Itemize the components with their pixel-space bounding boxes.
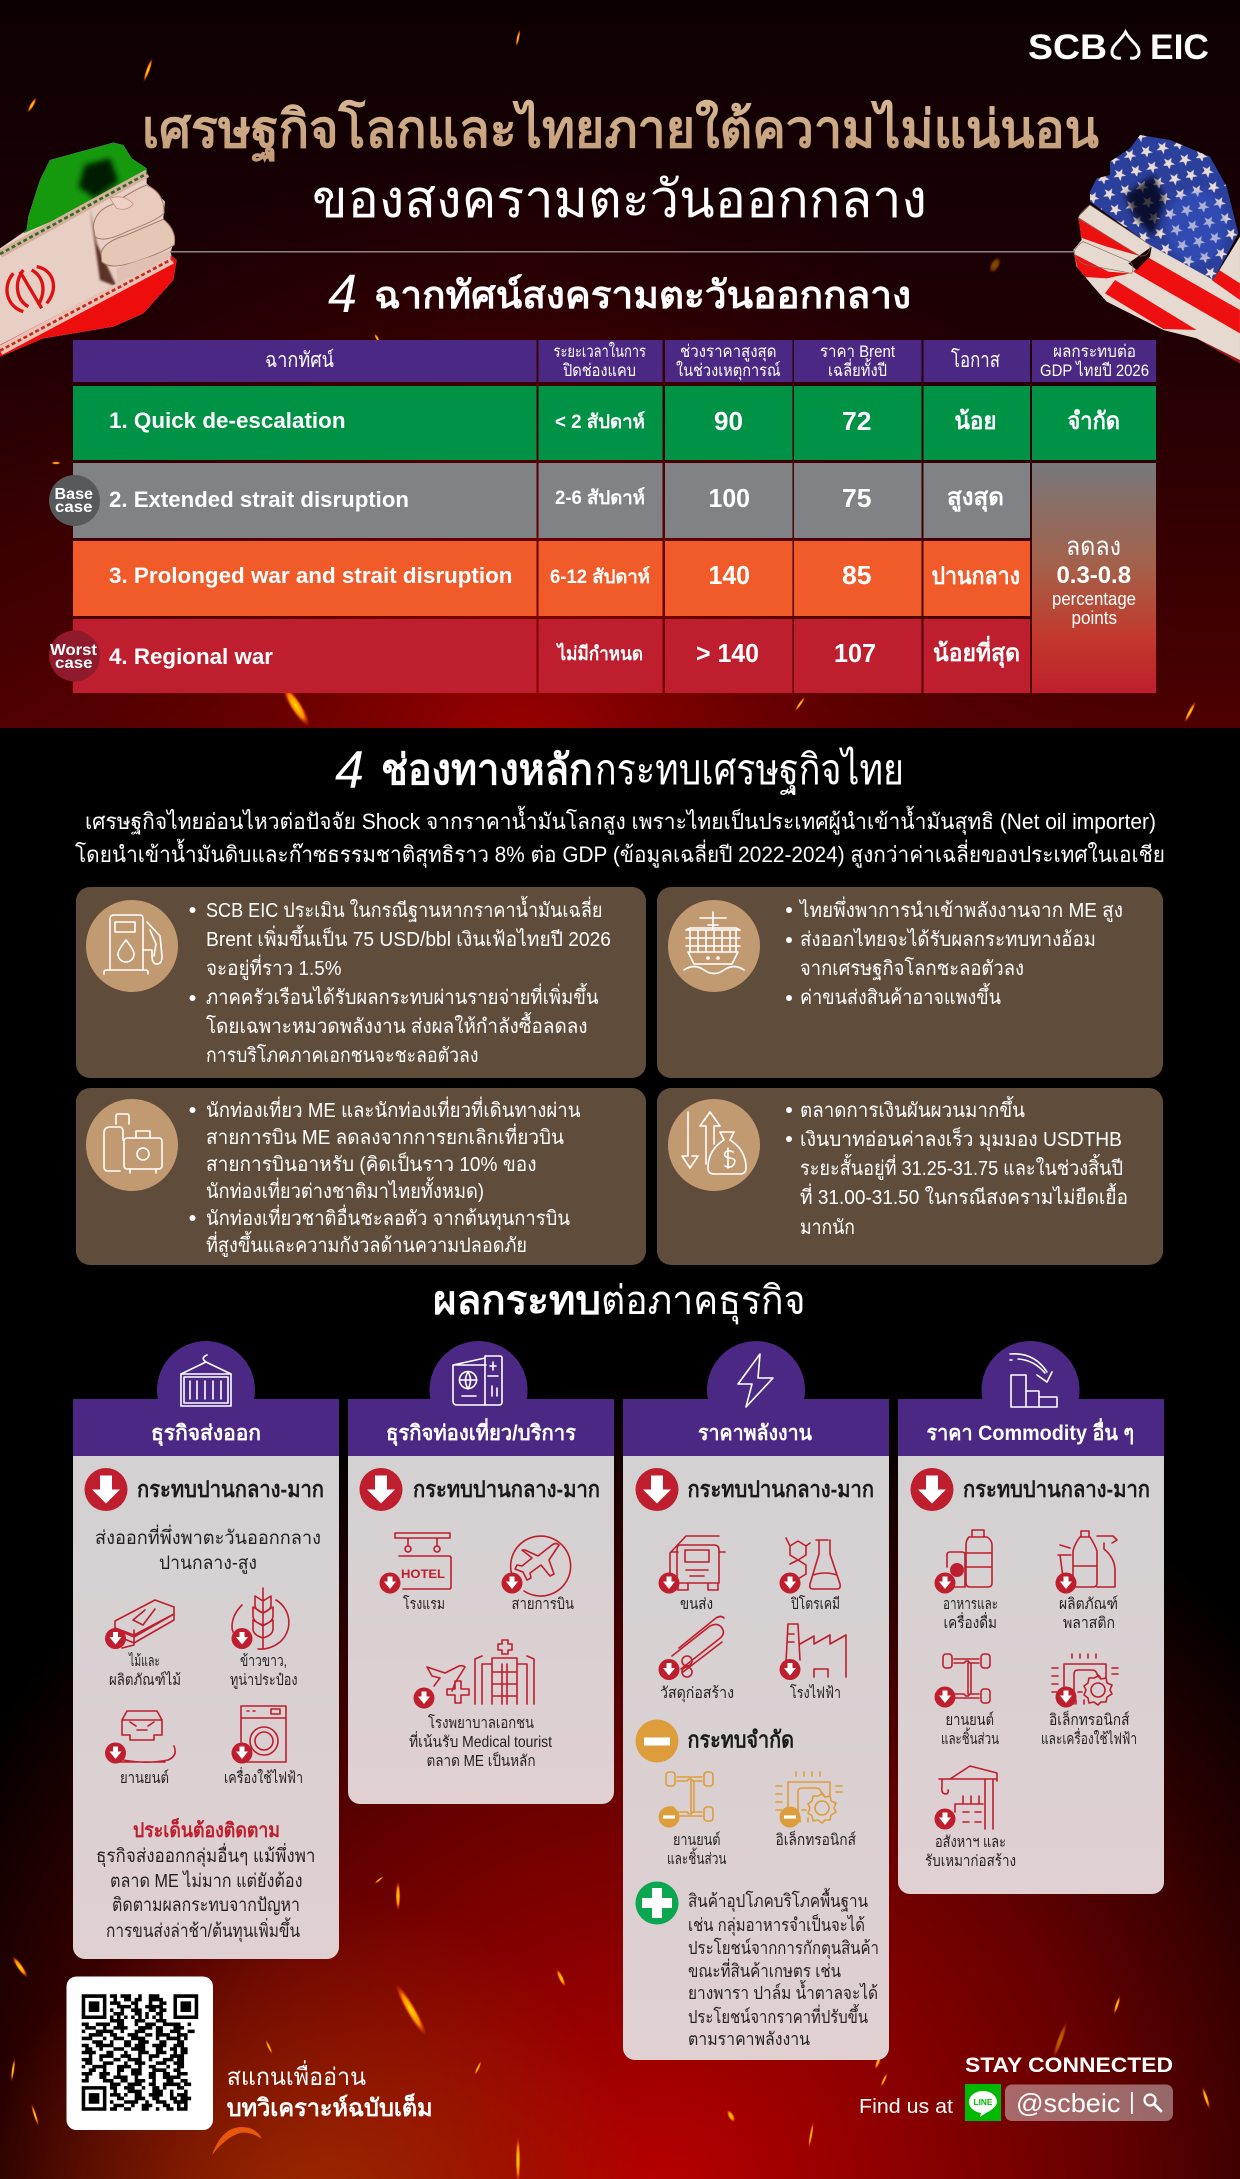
text: exports dependent on ME: ส่งออกที่พึ่งพาตะวันออกกลาง <box>95 1524 321 1549</box>
text: issues to watch: ติดตามผลกระทบจากปัญหา <box>112 1894 300 1916</box>
text: exports dependent on ME: ปานกลาง-สูง <box>159 1553 257 1574</box>
row 1: quick de-escalation: 90 <box>714 406 743 436</box>
text: issues to watch <box>96 1817 316 1943</box>
label: wood <box>109 1652 181 1689</box>
row 2: extended strait disruption: 2. Extended strait disruption <box>109 487 409 512</box>
table header: โอกาส <box>951 348 1000 372</box>
impact label: กระทบปานกลาง-มาก <box>413 1476 600 1502</box>
icon: lightning bolt <box>738 1354 773 1407</box>
row 1: quick de-escalation: 1. Quick de-escalation <box>109 408 346 433</box>
table: scenarios <box>73 340 1156 693</box>
handle pill: @scbeic <box>1016 2088 1120 2118</box>
badge: base case: case <box>55 499 93 516</box>
heading: 4 channels <box>335 741 904 800</box>
badge: worst case: Worst <box>50 642 98 659</box>
table header: ปิดช่องแคบ <box>562 361 636 380</box>
table header: ฉากทัศน์ <box>265 348 334 372</box>
intro paragraph: เศรษฐกิจไทยอ่อนไหวต่อปัจจัย Shock จากราคาน้ำมันโลกสูง เพราะไทยเป็นประเทศผู้นำเข้าน้ำมันสุทธิ (Net oil importer) <box>85 806 1156 835</box>
heading: 4 scenarios: ฉากทัศน์สงครามตะวันออกกลาง <box>374 274 911 317</box>
heading: business impact: ต่อภาคธุรกิจ <box>601 1279 806 1325</box>
text: issues to watch: ประเด็นต้องติดตาม <box>133 1817 280 1842</box>
panel: energy and inflation channel <box>76 887 646 1078</box>
label: cars: ยานยนต์ <box>120 1769 169 1787</box>
icon: Iran flag fist <box>0 143 180 360</box>
text: positive impact: ประโยชน์จากราคาที่ปรับขึ้น <box>688 2004 868 2027</box>
panel: tourism channel: ที่สูงขึ้นและความกังวลด้านความปลอดภัย <box>206 1231 527 1258</box>
label: rice: ข้าวขาว, <box>240 1653 287 1670</box>
label: plastic products <box>1059 1595 1118 1632</box>
label: electronics: อิเล็กทรอนิกส์ <box>776 1830 856 1849</box>
row 4: regional war: > 140 <box>696 638 759 668</box>
merged GDP impact cell: ลดลง <box>1066 531 1121 561</box>
panel: financial market channel <box>657 1088 1163 1265</box>
row 4: regional war: น้อยที่สุด <box>933 635 1020 669</box>
table header: เฉลี่ยทั้งปี <box>828 358 887 380</box>
text: positive impact: ขณะที่สินค้าเกษตร เช่น <box>688 1958 841 1981</box>
label: real estate: อสังหาฯ และ <box>935 1834 1006 1851</box>
text: positive impact: เช่น กลุ่มอาหารจำเป็นจะได้ <box>688 1913 865 1936</box>
row 3: prolonged war and strait disruption: ปานกลาง <box>932 563 1020 590</box>
panel: financial market channel: เงินบาทอ่อนค่าลงเร็ว มุมมอง USDTHB <box>800 1126 1122 1152</box>
background: top section <box>0 0 1240 728</box>
row 2: extended strait disruption: 2-6 สัปดาห์ <box>555 487 645 509</box>
social: stay connected: STAY CONNECTED <box>965 2054 1173 2077</box>
label: appliances: เครื่องใช้ไฟฟ้า <box>224 1767 303 1787</box>
icon: lotus logo mark <box>1112 32 1139 58</box>
impact label: กระทบปานกลาง-มาก <box>688 1476 874 1502</box>
merged GDP impact cell: points <box>1072 608 1117 628</box>
heading: 4 channels: ช่องทางหลัก <box>381 746 593 793</box>
label: auto parts: ยานยนต์ <box>673 1831 720 1849</box>
row 2: extended strait disruption: 100 <box>708 483 750 513</box>
icon: hotel: HOTEL <box>401 1567 445 1581</box>
label: food and beverage: เครื่องดื่ม <box>944 1612 997 1632</box>
merged GDP impact cell: 0.3-0.8 <box>1056 562 1131 589</box>
intro paragraph <box>75 806 1165 868</box>
row 1: quick de-escalation: น้อย <box>954 408 996 435</box>
social: stay connected <box>859 2054 1173 2121</box>
panel: energy and inflation channel: การบริโภคภาคเอกชนจะชะลอตัวลง <box>206 1044 478 1067</box>
icon: passport and ticket <box>453 1356 502 1405</box>
panel: trade channel: ส่งออกไทยจะได้รับผลกระทบทางอ้อม <box>800 928 1096 951</box>
logo: SCB EIC <box>1028 28 1209 67</box>
panel header <box>898 1341 1164 1456</box>
table header: ราคา Brent <box>820 342 895 361</box>
label: electronics and appliances: และเครื่องใช้ไฟฟ้า <box>1041 1728 1137 1748</box>
panel header: ธุรกิจท่องเที่ยว/บริการ <box>386 1417 577 1447</box>
row 1: quick de-escalation: จำกัด <box>1068 408 1120 435</box>
QR caption: สแกนเพื่ออ่าน <box>227 2060 366 2091</box>
row 3: prolonged war and strait disruption: 3. Prolonged war and strait disruption <box>109 563 512 588</box>
icon: USA flag fist <box>1073 135 1240 363</box>
table header: ผลกระทบต่อ <box>1053 342 1136 361</box>
panel: tourism channel: นักท่องเที่ยว ME และนักท่องเที่ยวที่เดินทางผ่าน <box>206 1096 581 1122</box>
badge: base case <box>49 475 100 526</box>
QR code card <box>66 1976 213 2130</box>
text: positive impact: ประโยชน์จากการกักตุนสินค้า <box>688 1937 879 1959</box>
label: private hospitals: ที่เน้นรับ Medical tourist <box>409 1731 553 1751</box>
row 4: regional war: ไม่มีกำหนด <box>556 642 643 665</box>
icon: electronics <box>1052 1654 1118 1708</box>
icon: luggage <box>104 1114 162 1173</box>
heading: 4 channels: กระทบเศรษฐกิจไทย <box>595 746 904 795</box>
icon: construction crane <box>934 1766 997 1830</box>
intro paragraph: โดยนำเข้าน้ำมันดิบและก๊าซธรรมชาติสุทธิราว 8% ต่อ GDP (ข้อมูลเฉลี่ยปี 2022-2024) สูงกว่าค่าเฉลี่ยของประเทศในเอเชีย <box>75 839 1165 868</box>
icon: money bag and arrows <box>682 1112 746 1174</box>
icon: auto parts (amber) <box>658 1772 713 1828</box>
panel: financial market channel: ระยะสั้นอยู่ที่ 31.25-31.75 และในช่วงสิ้นปี <box>800 1154 1123 1181</box>
panel: financial market channel: มากนัก <box>800 1217 855 1239</box>
label: plastic products: พลาสติก <box>1063 1615 1115 1632</box>
panel: other commodity prices <box>898 1341 1164 1894</box>
label: wood: ผลิตภัณฑ์ไม้ <box>109 1671 181 1689</box>
text: issues to watch: การขนส่งล่าช้า/ต้นทุนเพิ่มขึ้น <box>106 1917 300 1943</box>
label: petrochemicals: ปิโตรเคมี <box>790 1595 840 1613</box>
title: ของสงครามตะวันออกกลาง <box>312 171 927 229</box>
icon: shipping container <box>181 1355 231 1406</box>
icon: container ship <box>684 912 744 974</box>
text: positive impact: สินค้าอุปโภคบริโภคพื้นฐาน <box>688 1888 868 1912</box>
table header <box>73 340 1156 382</box>
panel: energy and inflation channel: ภาคครัวเรือนได้รับผลกระทบผ่านรายจ่ายที่เพิ่มขึ้น <box>206 983 599 1009</box>
icon: hotel <box>380 1533 451 1594</box>
label: private hospitals: โรงพยาบาลเอกชน <box>428 1714 534 1732</box>
text: exports dependent on ME <box>95 1524 321 1574</box>
QR caption: บทวิเคราะห์ฉบับเต็ม <box>227 2093 433 2122</box>
panel: energy and inflation channel: จะอยู่ที่ราว 1.5% <box>206 954 342 981</box>
label: auto parts: ยานยนต์ <box>946 1711 994 1729</box>
label: airline: สายการบิน <box>512 1596 574 1613</box>
table header: ช่วงราคาสูงสุด <box>680 342 776 362</box>
impact label <box>84 1468 324 1511</box>
row 3: prolonged war and strait disruption: 85 <box>842 560 872 590</box>
icon: food and beverage <box>934 1530 992 1594</box>
label: food and beverage: อาหารและ <box>943 1596 998 1613</box>
handle pill <box>1005 2084 1173 2121</box>
label: rice <box>230 1653 298 1690</box>
panel: energy prices <box>623 1341 889 2060</box>
panel: tourism channel: สายการบิน ME ลดลงจากการยกเลิกเที่ยวบิน <box>206 1123 564 1149</box>
title <box>142 98 1099 229</box>
panel: energy and inflation channel: SCB EIC ประเมิน ในกรณีฐานหากราคาน้ำมันเฉลี่ย <box>206 896 602 922</box>
row 4: regional war: 107 <box>834 638 876 668</box>
text: positive impact <box>688 1888 879 2049</box>
panel header <box>623 1341 889 1456</box>
label: plastic products: ผลิตภัณฑ์ <box>1059 1595 1118 1613</box>
panel: financial market channel: ตลาดการเงินผันผวนมากขึ้น <box>800 1096 1025 1122</box>
panel: tourism channel: นักท่องเที่ยวชาติอื่นชะลอตัว จากต้นทุนการบิน <box>206 1204 570 1231</box>
icon: falling commodity chart <box>1010 1354 1057 1407</box>
icon: construction materials <box>658 1616 724 1680</box>
row 3: prolonged war and strait disruption: 6-12 สัปดาห์ <box>550 566 650 588</box>
panel: energy and inflation channel: Brent เพิ่มขึ้นเป็น 75 USD/bbl เงินเฟ้อไทยปี 2026 <box>206 925 611 951</box>
icon: LINE <box>965 2084 1001 2121</box>
label: auto parts: และชิ้นส่วน <box>667 1847 727 1868</box>
QR caption <box>227 2060 433 2122</box>
row 2: extended strait disruption: สูงสุด <box>947 484 1004 513</box>
icon: fuel pump <box>104 915 162 974</box>
panel: tourism channel: สายการบินอาหรับ (คิดเป็นราว 10% ของ <box>206 1151 536 1176</box>
label: private hospitals <box>409 1714 553 1770</box>
row 2: extended strait disruption <box>73 463 1030 538</box>
panel header <box>73 1341 339 1456</box>
impact label <box>636 1468 874 1511</box>
heading: business impact <box>433 1279 806 1325</box>
text: issues to watch: ธุรกิจส่งออกกลุ่มอื่นๆ แม้พึ่งพา <box>96 1843 316 1868</box>
title: เศรษฐกิจโลกและไทยภายใต้ความไม่แน่นอน <box>142 98 1099 163</box>
table header: ในช่วงเหตุการณ์ <box>676 360 781 381</box>
label: electronics and appliances: อิเล็กทรอนิกส์ <box>1049 1710 1130 1729</box>
label: real estate: รับเหมาก่อสร้าง <box>925 1853 1016 1870</box>
panel: tourism channel: นักท่องเที่ยวต่างชาติมาไทยทั้งหมด) <box>206 1177 484 1203</box>
text: issues to watch: ตลาด ME ไม่มาก แต่ยังต้อง <box>110 1870 302 1891</box>
panel: financial market channel: ที่ 31.00-31.50 ในกรณีสงครามไม่ยืดเยื้อ <box>800 1183 1128 1209</box>
panel: trade channel: ไทยพึ่งพาการนำเข้าพลังงานจาก ME สูง <box>798 896 1123 923</box>
label: rice: ทูน่าประป๋อง <box>230 1672 298 1690</box>
heading: 4 channels: 4 <box>335 741 364 800</box>
label: transport: ขนส่ง <box>680 1596 713 1613</box>
merged GDP impact cell: percentage <box>1052 589 1136 609</box>
label: food and beverage <box>943 1596 998 1632</box>
badge: worst case <box>49 630 100 682</box>
impact label <box>360 1468 600 1511</box>
label: power plants: โรงไฟฟ้า <box>790 1684 841 1702</box>
text: positive impact: ยางพารา ปาล์ม น้ำตาลจะได้ <box>688 1980 878 2003</box>
impact label: กระทบปานกลาง-มาก <box>963 1476 1150 1502</box>
logo: SCB EIC: EIC <box>1150 28 1209 67</box>
label: real estate <box>925 1834 1016 1870</box>
panel: trade channel <box>657 887 1163 1078</box>
panel header: ราคา Commodity อื่น ๆ <box>926 1417 1134 1445</box>
social: stay connected: Find us at <box>859 2096 953 2118</box>
positive impact icon <box>636 1882 678 1924</box>
icon: auto parts <box>934 1654 990 1708</box>
label: electronics and appliances <box>1041 1710 1137 1748</box>
badge: base case: Base <box>54 486 93 503</box>
icon: wood products <box>105 1600 174 1649</box>
icon: rice and tuna <box>232 1588 289 1649</box>
row 3: prolonged war and strait disruption: 140 <box>708 560 750 590</box>
label: private hospitals: ตลาด ME เป็นหลัก <box>426 1751 536 1770</box>
label: auto parts: และชิ้นส่วน <box>941 1727 999 1748</box>
label: wood: ไม้และ <box>128 1652 160 1670</box>
icon: washing machine <box>232 1706 286 1764</box>
row 2: extended strait disruption: 75 <box>842 483 872 513</box>
row 1: quick de-escalation: < 2 สัปดาห์ <box>555 411 645 433</box>
logo: SCB EIC: SCB <box>1028 28 1107 67</box>
icon: truck <box>658 1536 725 1594</box>
icon: power plant <box>780 1624 846 1680</box>
icon: petrochemical <box>780 1538 840 1594</box>
badge: worst case: case <box>55 655 93 672</box>
icon: hospital and medical tourism <box>414 1640 534 1708</box>
row 1: quick de-escalation: 72 <box>842 406 872 436</box>
panel: tourism and services business <box>348 1341 614 1804</box>
row 4: regional war: 4. Regional war <box>109 644 273 669</box>
panel header: ราคาพลังงาน <box>698 1422 813 1445</box>
icon: car <box>105 1711 175 1764</box>
merged GDP impact cell <box>1032 463 1156 693</box>
label: auto parts <box>941 1711 999 1748</box>
panel header <box>348 1341 614 1456</box>
background: lower section <box>0 728 1240 2179</box>
row 3: prolonged war and strait disruption <box>73 541 1030 616</box>
heading: 4 scenarios <box>328 264 911 324</box>
panel: export business <box>73 1341 339 1959</box>
panel: tourism channel <box>76 1088 646 1265</box>
panel header: ธุรกิจส่งออก <box>151 1422 261 1447</box>
panel: trade channel: ค่าขนส่งสินค้าอาจแพงขึ้น <box>800 983 1001 1009</box>
icon: LINE: LINE <box>974 2097 993 2107</box>
limited impact label <box>636 1720 794 1762</box>
icon: airline <box>502 1536 571 1596</box>
icon: plastic products <box>1056 1531 1117 1594</box>
impact label <box>910 1468 1150 1511</box>
table header: GDP ไทยปี 2026 <box>1040 360 1149 380</box>
heading: business impact: ผลกระทบ <box>433 1279 601 1323</box>
label: construction materials: วัสดุก่อสร้าง <box>660 1685 734 1703</box>
impact label: กระทบปานกลาง-มาก <box>137 1476 324 1502</box>
heading: 4 scenarios: 4 <box>328 264 357 324</box>
text: positive impact: ตามราคาพลังงาน <box>688 2029 810 2049</box>
table header: ระยะเวลาในการ <box>554 341 646 361</box>
row 1: quick de-escalation <box>73 386 1156 460</box>
panel: trade channel: จากเศรษฐกิจโลกชะลอตัวลง <box>800 957 1024 980</box>
row 4: regional war <box>73 619 1030 693</box>
panel: energy and inflation channel: โดยเฉพาะหมวดพลังงาน ส่งผลให้กำลังซื้อลดลง <box>206 1012 588 1038</box>
icon: electronics (amber) <box>776 1772 842 1828</box>
label: hotel: โรงแรม <box>403 1595 445 1613</box>
label: auto parts <box>667 1831 727 1868</box>
limited impact label: กระทบจำกัด <box>688 1726 794 1752</box>
